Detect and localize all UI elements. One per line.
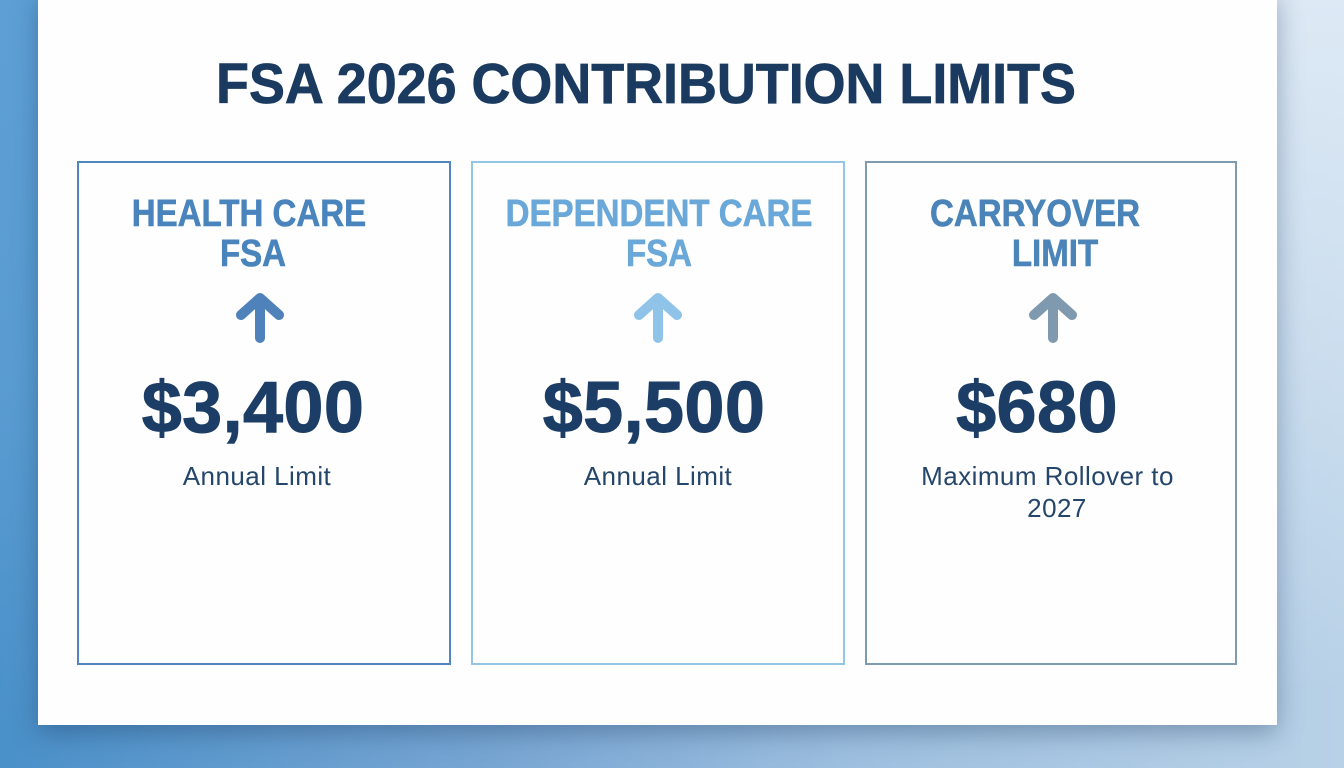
heading: carryover limit (930, 193, 1140, 275)
title: FSA 2026 CONTRIBUTION LIMITS (216, 52, 1076, 116)
icon: up arrow (236, 293, 284, 343)
heading: dependent care FSA: FSA (625, 233, 692, 275)
heading: carryover limit: CARRYOVER (930, 193, 1140, 235)
icon: up arrow (634, 293, 682, 343)
amount: $3,400 (142, 368, 364, 448)
heading: health care FSA: HEALTH CARE (132, 193, 366, 235)
caption: 2027 (1027, 493, 1087, 523)
amount: $680 (956, 368, 1118, 448)
icon: up arrow (1029, 293, 1077, 343)
caption (921, 461, 1174, 523)
heading: dependent care FSA: DEPENDENT CARE (505, 193, 812, 235)
heading: dependent care FSA (505, 193, 812, 275)
caption: Annual Limit (584, 461, 732, 491)
panel: health care FSA (77, 161, 451, 665)
heading: health care FSA: FSA (219, 233, 286, 275)
panel: carryover limit (865, 161, 1237, 665)
heading: health care FSA (132, 193, 366, 275)
heading: carryover limit: LIMIT (1012, 233, 1098, 275)
caption: Maximum Rollover to (921, 461, 1174, 491)
amount: $5,500 (543, 368, 765, 448)
panel: dependent care FSA (471, 161, 845, 665)
caption: Annual Limit (183, 461, 331, 491)
